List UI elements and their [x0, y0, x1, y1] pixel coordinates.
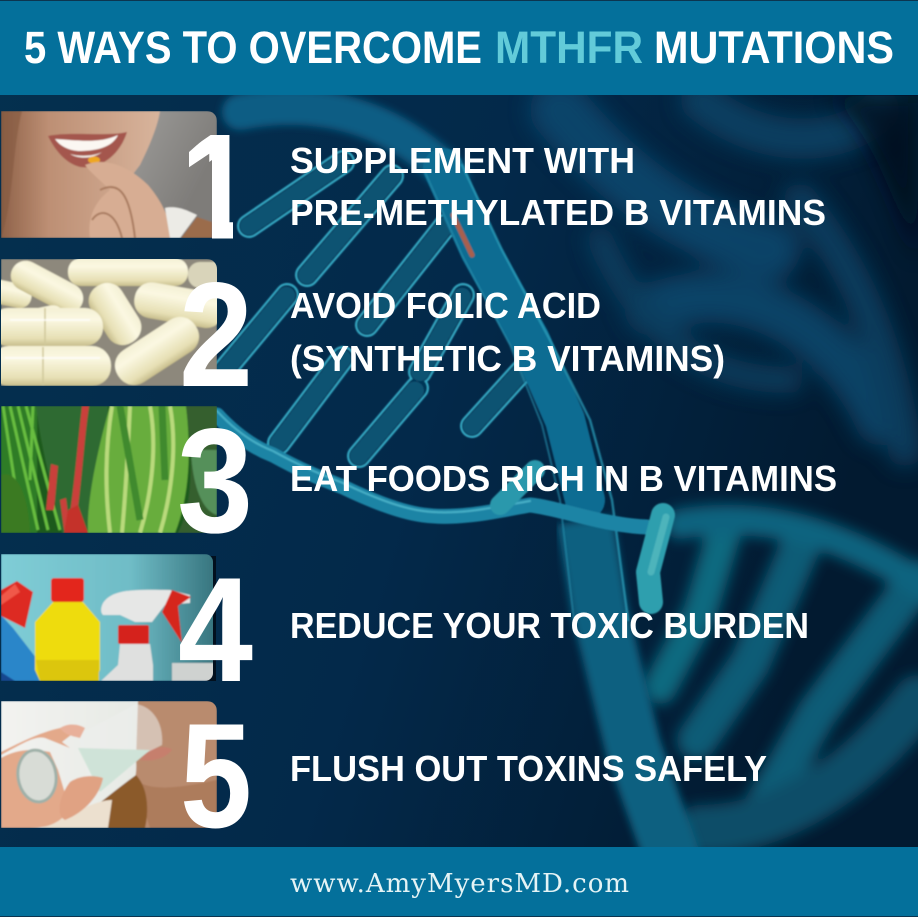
step 1 text: PRE-METHYLATED B VITAMINS	[290, 192, 826, 233]
step 5 text: FLUSH OUT TOXINS SAFELY	[290, 748, 767, 789]
step 4 text: REDUCE YOUR TOXIC BURDEN	[290, 605, 809, 646]
upper soft strand band	[240, 107, 450, 175]
step 2 text: (SYNTHETIC B VITAMINS)	[290, 338, 725, 379]
number 2: 2	[179, 251, 253, 418]
step 3 text: EAT FOODS RICH IN B VITAMINS	[290, 458, 837, 499]
website url: www.AmyMyersMD.com	[290, 869, 629, 899]
main helix strands	[217, 162, 680, 880]
title: MUTATIONS	[654, 22, 894, 73]
number 5: 5	[180, 692, 252, 859]
lower right soft rungs	[660, 520, 918, 830]
title: 5 WAYS TO OVERCOME	[24, 22, 482, 73]
step 2 text	[290, 285, 725, 379]
number 4: 4	[178, 546, 253, 713]
panel: photo 3 leafy greens	[1, 406, 217, 533]
number 3: 3	[177, 397, 253, 564]
step 1 text: SUPPLEMENT WITH	[290, 140, 635, 181]
blurred distant helix	[560, 100, 905, 450]
step 1 text	[290, 140, 826, 233]
step 2 text: AVOID FOLIC ACID	[290, 285, 601, 326]
panel: photo 2 cream capsules	[1, 259, 217, 386]
title: MTHFR	[495, 22, 643, 73]
panel: photo 5 woman drinking water	[1, 701, 217, 828]
panel: photo 1 woman taking a pill	[1, 111, 217, 238]
header bar	[0, 0, 918, 95]
dark edge vignette	[830, 96, 918, 260]
panel: photo 4 cleaning bottles	[1, 554, 217, 681]
title	[24, 22, 894, 73]
number 1: 1	[177, 103, 255, 270]
footer bar	[0, 847, 918, 917]
